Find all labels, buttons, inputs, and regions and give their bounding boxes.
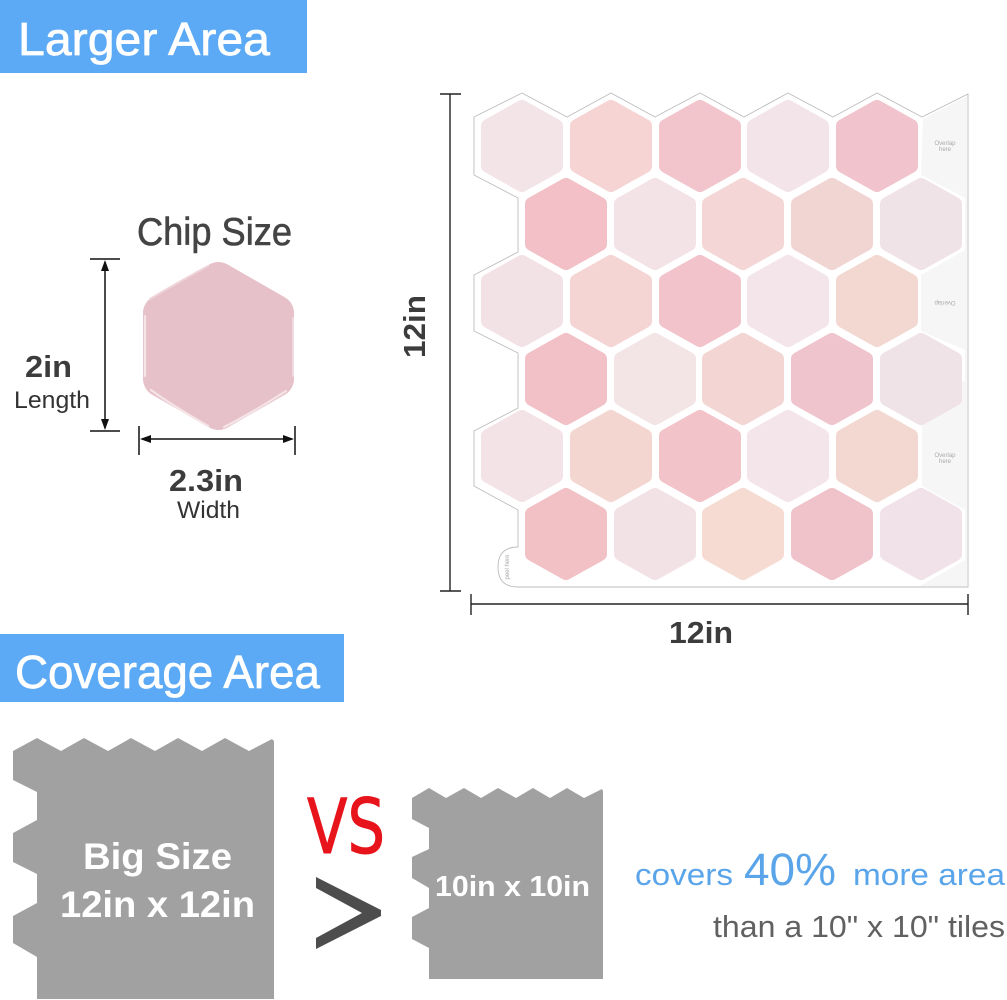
banner: Larger Area (0, 0, 307, 73)
text: VS: VS (307, 782, 385, 871)
callout: covers 40% more area: 40% (744, 844, 836, 895)
tile row 3 (488, 262, 911, 340)
label: 2in length: 2in (25, 349, 72, 384)
label: 2in length (14, 349, 90, 414)
banner: Coverage Area (0, 634, 344, 702)
label: 2.3in width: Width (177, 497, 240, 524)
tile backing sheet (474, 93, 968, 587)
overlap notes (934, 141, 956, 465)
tile row 5 (488, 417, 911, 495)
overlap notes: here (939, 147, 952, 153)
icon: single pink hexagon chip (145, 266, 293, 427)
tile row 2 (532, 185, 955, 263)
shape: big 12in tile silhouette: 12in x 12in (60, 884, 255, 925)
shape: small 10in tile silhouette (412, 788, 603, 979)
dimension: sheet width 12in: 12in (669, 615, 733, 650)
shape: small 10in tile silhouette: 10in x 10in (435, 871, 590, 903)
label: 2in length: Length (14, 387, 90, 414)
shape: big 12in tile silhouette (13, 738, 274, 999)
banner: Larger Area: Larger Area (18, 13, 270, 65)
icon: greater-than sign (316, 877, 381, 949)
overlap notes: Overlap (934, 453, 956, 459)
banner: Coverage Area: Coverage Area (15, 646, 320, 698)
arrow: chip width (139, 426, 295, 455)
dimension: sheet height 12in: 12in (397, 295, 432, 358)
overlap strip (920, 96, 967, 586)
arrow: chip length (90, 259, 120, 431)
heading: Chip Size: Chip Size (137, 211, 292, 254)
panel: 12in tile sheet (474, 93, 968, 587)
overlap notes: here (939, 459, 952, 465)
tile row 4 (532, 340, 955, 418)
callout: comparison with 10 x 10 tiles: than a 10" x 10" tiles (713, 909, 1005, 944)
callout: covers 40% more area: more area (853, 857, 1006, 892)
label: 2.3in width (169, 463, 243, 524)
peel tab note: peel here (505, 554, 511, 580)
overlap notes: Overlap (934, 299, 956, 305)
label: 2.3in width: 2.3in (169, 463, 243, 498)
callout: covers 40% more area (635, 844, 1006, 895)
tile row 6 (532, 495, 955, 573)
overlap notes: Overlap (934, 141, 956, 147)
callout: covers 40% more area: covers (635, 857, 733, 892)
shape: big 12in tile silhouette: Big Size (83, 836, 232, 877)
tile row 1 (488, 107, 911, 185)
